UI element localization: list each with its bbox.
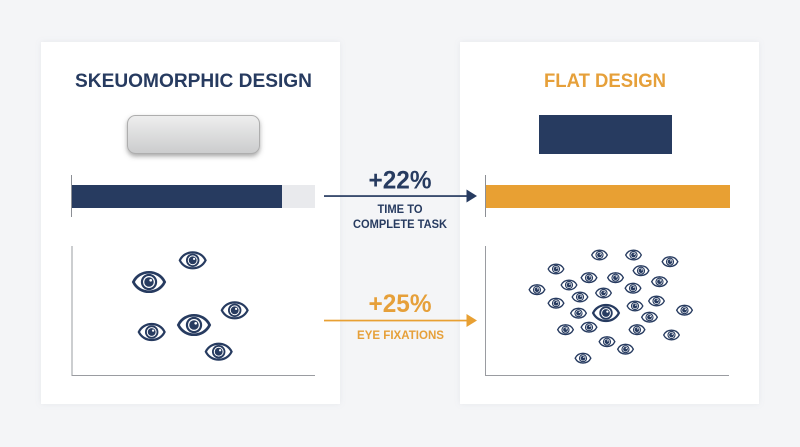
heading: flat design: FLAT DESIGN (544, 70, 666, 92)
label: time to complete task: TIME TO (378, 204, 423, 216)
heading: skeuomorphic design: SKEUOMORPHIC DESIGN (75, 70, 312, 92)
stat: +22%: +22% (368, 166, 432, 194)
panel: skeuomorphic design (41, 42, 340, 404)
label: eye fixations: EYE FIXATIONS (357, 330, 444, 342)
bar chart: time to complete task (71, 175, 315, 217)
bar chart: time to complete task (485, 175, 730, 217)
label: time to complete task (353, 204, 448, 231)
chart: eye fixations (486, 246, 729, 376)
chart: eye fixations (72, 246, 315, 376)
flat button (539, 115, 672, 154)
skeuomorphic button (128, 116, 260, 154)
panel: flat design (460, 42, 759, 404)
stat: +25%: +25% (368, 290, 432, 318)
arrow: navy time to complete task (324, 190, 477, 202)
label: time to complete task: COMPLETE TASK (353, 219, 448, 231)
arrow: orange eye fixations (324, 314, 477, 327)
